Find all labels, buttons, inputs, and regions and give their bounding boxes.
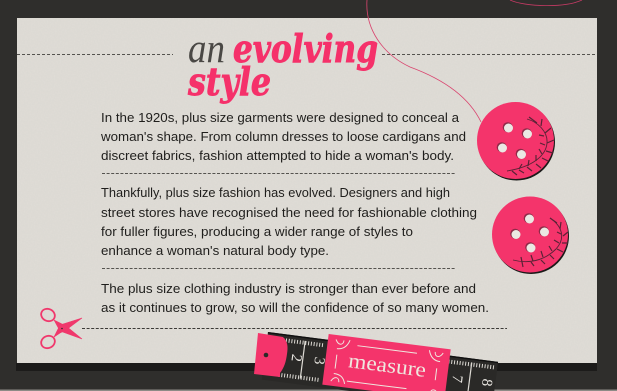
body paragraph 1: woman's shape. From column dresses to loose cardigans and xyxy=(100,129,466,144)
body paragraph 2: enhance a woman's natural body type. xyxy=(101,243,329,258)
thread xyxy=(367,0,481,122)
thread top right xyxy=(510,0,582,6)
body paragraph 1: In the 1920s, plus size garments were designed to conceal a xyxy=(101,110,460,125)
body paragraph 1: discreet fabrics, fashion attempted to hide a woman's body. xyxy=(101,148,454,163)
heading divider left xyxy=(17,54,173,56)
body paragraph 2: for fuller figures, producing a wider range of styles to xyxy=(101,224,413,239)
divider with scissors xyxy=(82,328,507,330)
body paragraph 3: The plus size clothing industry is stronger than ever before and xyxy=(101,281,476,296)
panel shadow xyxy=(16,363,597,371)
bottom edge line xyxy=(0,390,617,391)
icon: scissors xyxy=(39,307,82,350)
divider 2 xyxy=(102,268,456,270)
tape end tab xyxy=(254,333,288,377)
body paragraph 2 xyxy=(101,185,477,258)
tape body: 8 xyxy=(478,378,495,387)
title: style xyxy=(187,59,271,104)
body paragraph 3: as it continues to grow, so will the confidence of so many women. xyxy=(101,300,489,315)
tape body: 7 xyxy=(448,374,465,384)
measure label: measure xyxy=(347,348,427,382)
tape body: 2 xyxy=(287,353,304,363)
body paragraph 1 xyxy=(100,110,466,163)
tape body: 3 xyxy=(310,356,327,366)
icon: button 2 xyxy=(492,196,569,274)
body paragraph 3 xyxy=(101,281,489,315)
measuring tape xyxy=(254,332,498,391)
body paragraph 2: Thankfully, plus size fashion has evolved. Designers and high xyxy=(101,185,450,200)
icon: button 1 xyxy=(477,102,555,180)
tape body xyxy=(262,332,498,391)
divider 1 xyxy=(102,172,456,174)
title: evolving xyxy=(233,26,378,71)
measure label xyxy=(322,334,451,391)
title: an xyxy=(188,25,225,71)
title xyxy=(187,25,378,104)
body paragraph 2: street stores have recognised the need for fashionable clothing xyxy=(101,205,477,220)
heading divider right xyxy=(382,54,597,56)
